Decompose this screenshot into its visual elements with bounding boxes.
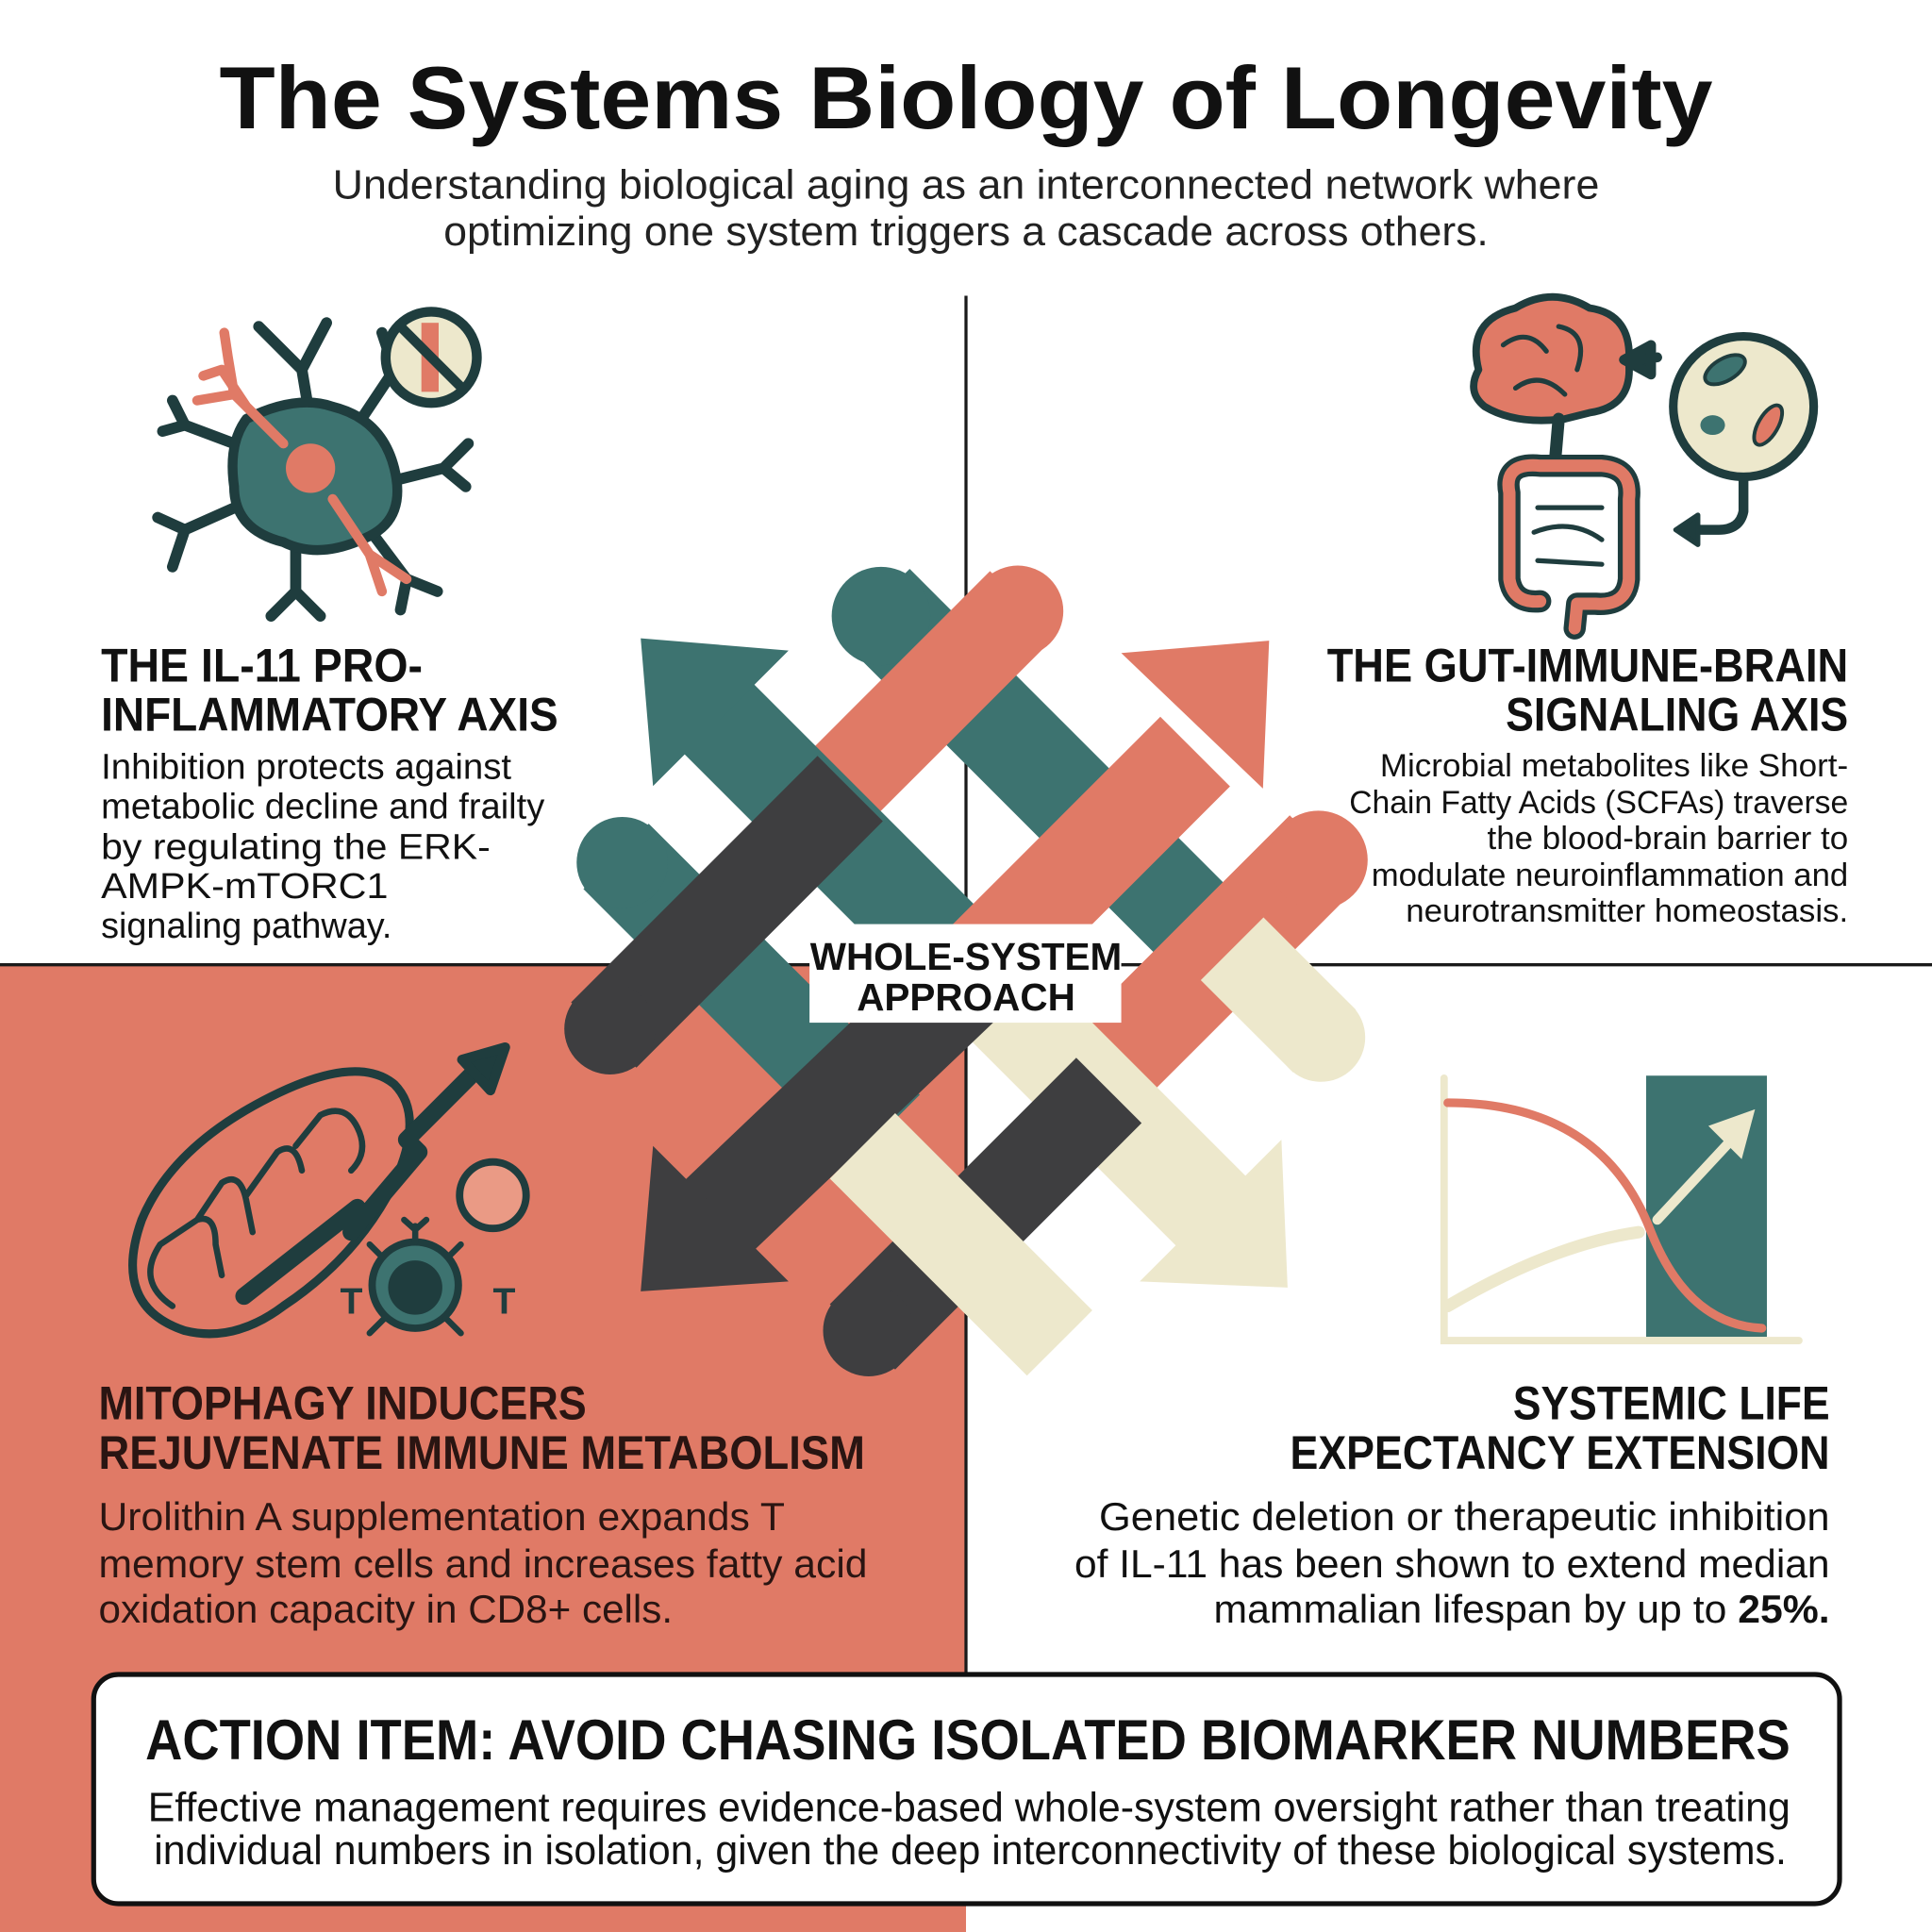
text block: life expectancy extension: SYSTEMIC LIFE: [1513, 1377, 1830, 1430]
text block: life expectancy extension: Genetic deletion or therapeutic inhibition: [1099, 1494, 1830, 1539]
text block: life expectancy extension: of IL-11 has been shown to extend median: [1074, 1541, 1830, 1586]
text block: gut-immune-brain axis: SIGNALING AXIS: [1506, 689, 1848, 741]
text block: mitophagy inducers: Urolithin A supplementation expands T: [98, 1494, 785, 1539]
text block: IL-11 axis: INFLAMMATORY AXIS: [101, 689, 558, 741]
text block: IL-11 axis: by regulating the ERK-: [101, 827, 491, 867]
text block: IL-11 axis: signaling pathway.: [101, 907, 391, 946]
chart: woven arrows: [564, 566, 1368, 1376]
subtitle: [333, 162, 1599, 255]
text block: IL-11 axis: THE IL-11 PRO-: [101, 639, 423, 691]
callout: action item: [93, 1674, 1840, 1904]
text block: gut-immune-brain axis: modulate neuroinflammation and: [1372, 858, 1848, 893]
icon: lifespan chart: [1444, 1075, 1799, 1341]
icon: mitochondrion with arrow and T cells: T: [340, 1281, 362, 1322]
text block: mitophagy inducers: memory stem cells and increases fatty acid: [98, 1541, 868, 1586]
text block: gut-immune-brain axis: [1327, 639, 1848, 929]
icon: mitochondrion with arrow and T cells: [133, 1047, 526, 1334]
text block: gut-immune-brain axis: THE GUT-IMMUNE-BRAIN: [1327, 639, 1848, 691]
text block: life expectancy extension: mammalian lifespan by up to 25%.: [1214, 1587, 1830, 1631]
subtitle: Understanding biological aging as an interconnected network where: [333, 162, 1599, 208]
icon: mitochondrion with arrow and T cells: T: [492, 1281, 515, 1322]
text block: IL-11 axis: Inhibition protects against: [101, 747, 512, 787]
center label: APPROACH: [857, 975, 1075, 1019]
text block: mitophagy inducers: oxidation capacity in CD8+ cells.: [98, 1587, 673, 1631]
text block: gut-immune-brain axis: the blood-brain barrier to: [1487, 821, 1848, 857]
subtitle: optimizing one system triggers a cascade across others.: [443, 209, 1489, 255]
text block: life expectancy extension: [1074, 1377, 1830, 1631]
text block: gut-immune-brain axis: Chain Fatty Acids (SCFAs) traverse: [1349, 785, 1848, 821]
text block: life expectancy extension: EXPECTANCY EXTENSION: [1291, 1426, 1830, 1479]
text block: IL-11 axis: [101, 639, 558, 946]
text block: IL-11 axis: metabolic decline and frailty: [101, 787, 544, 826]
center label: WHOLE-SYSTEM: [810, 935, 1122, 978]
title: The Systems Biology of Longevity: [219, 48, 1713, 147]
text block: mitophagy inducers: REJUVENATE IMMUNE METABOLISM: [98, 1426, 865, 1479]
callout: action item: ACTION ITEM: AVOID CHASING ISOLATED BIOMARKER NUMBERS: [145, 1708, 1790, 1772]
callout: action item: individual numbers in isolation, given the deep interconnectivity of these biological systems.: [154, 1828, 1787, 1874]
text block: gut-immune-brain axis: neurotransmitter homeostasis.: [1406, 893, 1848, 929]
text block: IL-11 axis: AMPK-mTORC1: [101, 867, 388, 907]
text block: mitophagy inducers: MITOPHAGY INDUCERS: [98, 1377, 587, 1430]
callout: action item: Effective management requires evidence-based whole-system oversight rather than treating: [148, 1785, 1790, 1830]
text block: gut-immune-brain axis: Microbial metabolites like Short-: [1380, 748, 1848, 784]
icon: brain gut microbiome: [1474, 297, 1814, 628]
text block: mitophagy inducers: [98, 1377, 868, 1631]
panel: mitophagy background: [0, 965, 966, 1932]
icon: neuron with inhibition sign: [158, 311, 476, 616]
center label: [809, 924, 1122, 1023]
